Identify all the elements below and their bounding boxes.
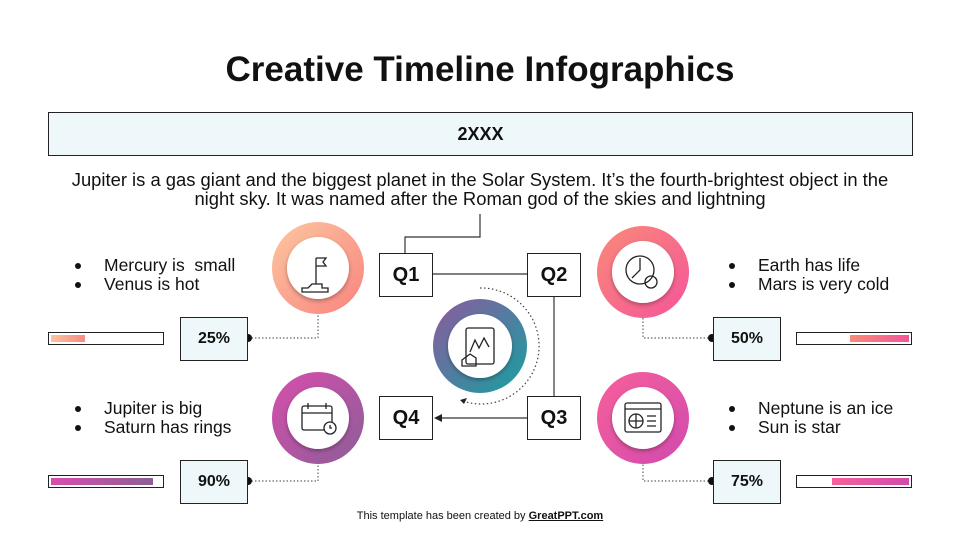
bars xyxy=(48,332,164,345)
text: 75% xyxy=(731,473,763,490)
year box xyxy=(48,112,913,156)
bullets xyxy=(75,255,235,294)
Q boxes: Q1 xyxy=(393,264,419,286)
text: Q3 xyxy=(541,406,567,428)
text: Mars is very cold xyxy=(758,274,889,294)
text: Earth has life xyxy=(758,255,860,275)
text: Neptune is an ice xyxy=(758,398,893,418)
Q boxes xyxy=(379,253,433,297)
description: night sky. It was named after the Roman god of the skies and lightning xyxy=(194,188,766,209)
title: Creative Timeline Infographics xyxy=(226,50,734,89)
text: Sun is star xyxy=(758,417,841,437)
description: Jupiter is a gas giant and the biggest planet in the Solar System. It’s the fourth-brightest object in the xyxy=(72,169,888,190)
text: Q4 xyxy=(393,406,419,428)
bullets: Mercury is small xyxy=(104,255,235,275)
text: 50% xyxy=(731,330,763,347)
percentage boxes: 25% xyxy=(198,330,230,347)
text: Jupiter is big xyxy=(104,398,202,418)
footer: This template has been created by GreatPPT.com xyxy=(357,510,603,522)
year box: 2XXX xyxy=(457,124,504,144)
text: Q2 xyxy=(541,264,567,286)
percentage boxes xyxy=(180,317,248,361)
bullets: Venus is hot xyxy=(104,274,199,294)
description xyxy=(72,169,888,209)
text: Saturn has rings xyxy=(104,417,231,437)
text: 90% xyxy=(198,473,230,490)
